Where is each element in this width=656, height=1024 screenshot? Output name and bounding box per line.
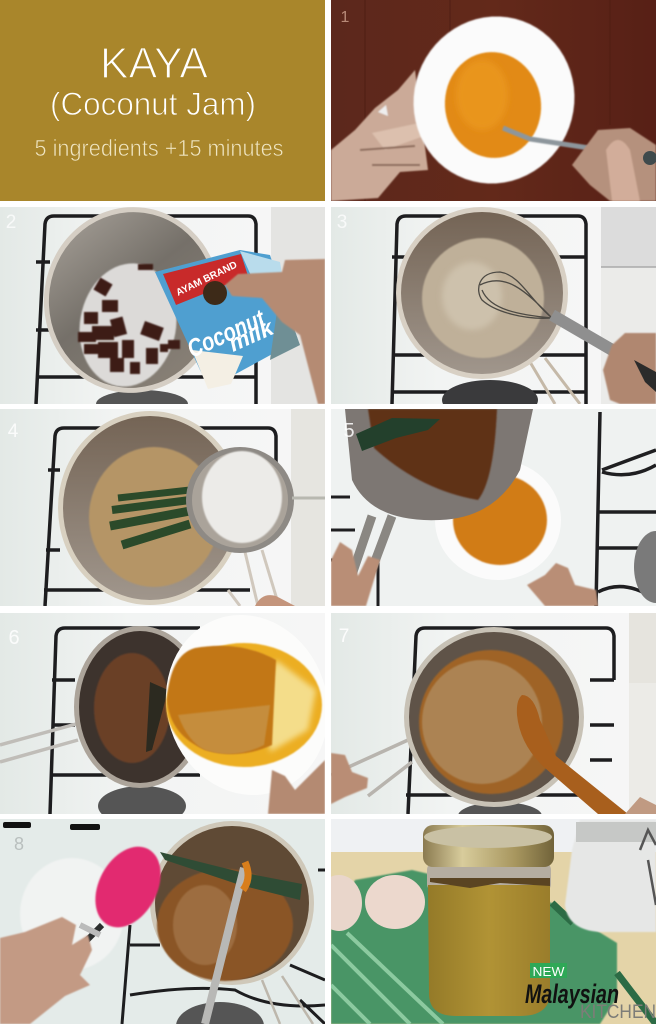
- logo: [525, 963, 656, 1023]
- step number: 7: [339, 626, 349, 647]
- sugar jar: [565, 820, 656, 932]
- orange blob: [167, 646, 276, 754]
- hand: [268, 760, 325, 814]
- palm sugar pieces: [78, 264, 180, 374]
- burner: [634, 531, 656, 603]
- hand left: [331, 542, 380, 606]
- egg yellow: [166, 643, 322, 767]
- pot handles: [530, 358, 580, 404]
- step number: 3: [337, 212, 347, 233]
- heading: Coconut Jam: (Coconut Jam): [50, 86, 256, 122]
- step number: 1: [341, 9, 350, 26]
- pot handles: [331, 740, 412, 796]
- lid: [423, 825, 554, 867]
- carton text: Coconut: [183, 304, 271, 363]
- logo NEW: NEW: [532, 964, 565, 979]
- heading: KAYA: KAYA: [100, 39, 209, 88]
- pot: [396, 207, 568, 379]
- kaya paste: [422, 660, 542, 784]
- metal tong: [205, 868, 244, 1024]
- bowl: [435, 460, 561, 580]
- pot: [58, 411, 242, 605]
- coconut palm sugar liquid: [89, 447, 219, 587]
- tong handle: [28, 925, 102, 1000]
- eggs: [316, 875, 425, 931]
- grate: [50, 628, 200, 814]
- bowl: [20, 858, 124, 970]
- step number: 8: [14, 834, 24, 854]
- pot handles: [262, 976, 313, 1024]
- hand right: [572, 128, 656, 201]
- panel: step 1 whisk egg yolks: [331, 0, 656, 201]
- liquid in pot: [368, 409, 497, 500]
- hand left: [331, 70, 428, 201]
- panel: step 8 remove pandan: [0, 819, 325, 1024]
- sugar: [202, 451, 282, 543]
- kaya jar: [423, 825, 554, 1016]
- pot pouring: [345, 409, 533, 520]
- panel: step 5 temper yolks: [331, 409, 656, 606]
- coconut milk carton: milk: [224, 314, 278, 357]
- panel: step 7 stir: [331, 613, 656, 814]
- yolk mixture: [453, 475, 547, 565]
- panel: step 2 coconut milk: [0, 207, 325, 404]
- panel: step 6 pour yolk into pot: [0, 613, 325, 814]
- panel: finished jar: [331, 819, 656, 1024]
- finger: [255, 595, 295, 606]
- hand: [603, 333, 656, 404]
- burner: [98, 786, 186, 826]
- pot: [74, 626, 206, 788]
- panel: step 4 add sugar and pandan: [0, 409, 325, 606]
- hand right: [527, 563, 598, 606]
- grate: [36, 216, 256, 404]
- carton label: AYAM BRAND: [174, 260, 239, 299]
- pandan: [146, 682, 168, 752]
- pandan leaf on tongs: [160, 852, 302, 900]
- step number: 4: [8, 421, 19, 442]
- panel: step 3 whisk mixture: [331, 207, 656, 404]
- jar contents: [428, 885, 550, 1016]
- step number: 6: [8, 627, 20, 649]
- tilted bowl: [143, 594, 351, 816]
- step number: 2: [6, 212, 16, 233]
- pink silicone tong head: [82, 835, 174, 939]
- pot: [32, 196, 232, 404]
- banana leaf: [331, 870, 617, 1024]
- pandan leaves: [110, 490, 190, 545]
- pot handles: [0, 724, 78, 762]
- grate: [122, 870, 325, 1024]
- step number: 5: [343, 420, 355, 442]
- egg yolk: [438, 46, 548, 164]
- hand: [0, 917, 92, 1024]
- pot handle: [345, 516, 392, 595]
- grate: [44, 428, 276, 606]
- coconut milk liquid: [422, 238, 544, 358]
- burner: [442, 380, 538, 420]
- caramel rim: [419, 650, 563, 794]
- tablecloth: [331, 852, 656, 1024]
- coconut milk carton: [155, 250, 300, 389]
- wooden spoon: [517, 695, 628, 814]
- pandan leaf: [356, 418, 440, 451]
- whisk: [479, 272, 650, 372]
- coconut milk pool: [70, 256, 186, 394]
- grate: [406, 628, 614, 814]
- measuring cup handles: [228, 550, 279, 606]
- whisk handle: [503, 128, 648, 157]
- hand left: [331, 753, 368, 804]
- hand right: [625, 797, 656, 814]
- subtitle: 5 ingredients +15 minutes: [34, 135, 284, 161]
- grate: [392, 216, 586, 404]
- panel: title: [0, 0, 325, 201]
- grate left: [331, 497, 378, 606]
- liquid in pot: [94, 653, 170, 763]
- bowl: [390, 0, 598, 206]
- pot: [150, 821, 314, 985]
- pot: [404, 627, 584, 807]
- kaya in pot: [157, 869, 293, 981]
- grate right: [596, 412, 656, 606]
- burner: [96, 390, 188, 418]
- measuring cup: [186, 447, 294, 553]
- hand: [225, 259, 325, 404]
- logo Malaysian: Malaysian: [525, 979, 619, 1009]
- burner: [458, 802, 542, 830]
- burner: [176, 1002, 264, 1024]
